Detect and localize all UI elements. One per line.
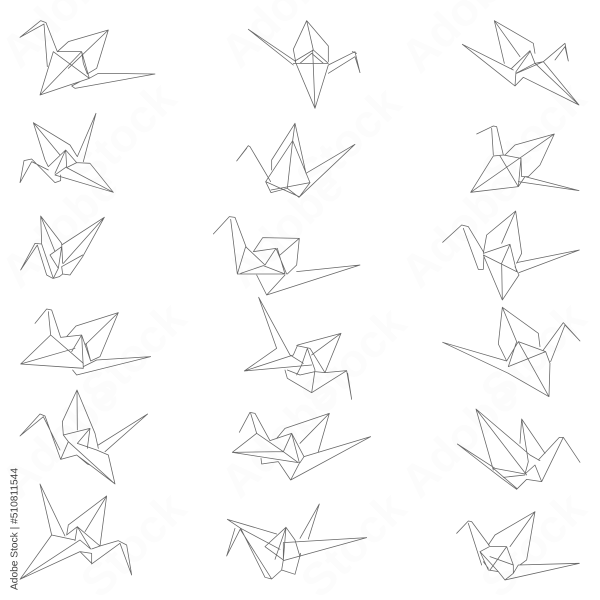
crane: row 2 right bbox=[471, 126, 579, 192]
watermark: diagonal stock text: Adobe bbox=[210, 369, 348, 507]
crane: row 6 right bbox=[457, 512, 579, 580]
watermark: diagonal stock text: Adobe bbox=[215, 159, 353, 297]
watermark: diagonal stock text: Adobe bbox=[390, 369, 528, 507]
watermark: diagonal stock text: Stock bbox=[285, 76, 411, 202]
watermark: diagonal stock text: Stock bbox=[70, 291, 196, 417]
crane: row 3 centre bbox=[213, 217, 360, 295]
crane: row 2 left bbox=[20, 113, 113, 192]
crane: row 4 left bbox=[21, 309, 151, 375]
crane: row 1 centre bbox=[248, 21, 360, 108]
crane: row 6 left bbox=[20, 484, 132, 579]
crane: row 5 right bbox=[457, 409, 580, 489]
crane: row 5 left bbox=[20, 390, 148, 484]
crane: row 4 right bbox=[443, 307, 580, 397]
crane: row 6 centre bbox=[227, 504, 367, 579]
crane: row 5 centre bbox=[232, 412, 371, 480]
crane: row 1 left bbox=[20, 21, 155, 95]
crane: row 3 right bbox=[443, 211, 579, 300]
watermark: diagonal stock text: Stock bbox=[60, 71, 186, 197]
crane: row 3 left bbox=[21, 216, 104, 278]
crane: row 4 centre bbox=[244, 297, 352, 399]
watermark: diagonal stock text: Stock bbox=[470, 291, 596, 417]
watermark: diagonal stock text: Stock bbox=[290, 296, 416, 422]
stock attribution text: Adobe Stock | #510811544 bbox=[8, 468, 20, 590]
watermark: diagonal stock text: Stock bbox=[470, 71, 596, 197]
watermark: diagonal stock text: Adobe bbox=[390, 159, 528, 297]
crane: row 1 right bbox=[462, 21, 579, 105]
crane: row 2 centre bbox=[237, 123, 355, 197]
